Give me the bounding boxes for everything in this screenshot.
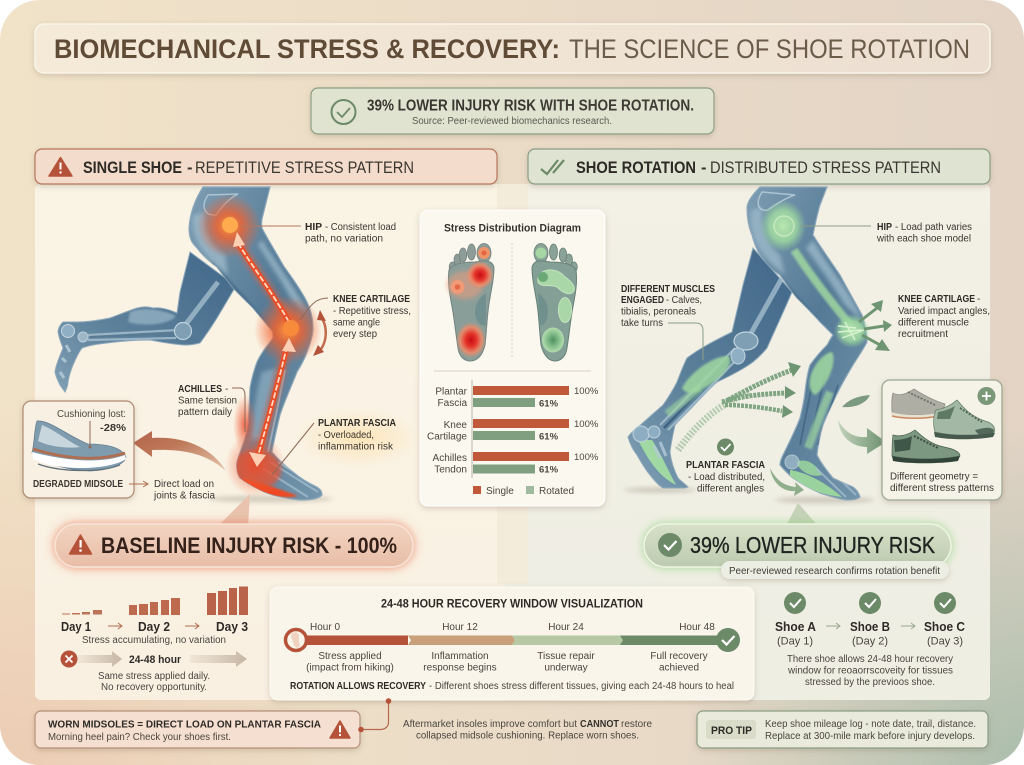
- heading: single shoe: -: [187, 159, 192, 177]
- icon: warning triangle: [70, 535, 92, 554]
- callout: different muscles engaged: tibialis, peroneals: [621, 306, 696, 318]
- callout: knee cartilage (rotation): KNEE CARTILAGE: [898, 294, 975, 305]
- panel: recovery window: 24-48 HOUR RECOVERY WINDOW VISUALIZATION: [381, 596, 643, 610]
- shoe rotation sequence: Shoe B: [850, 619, 890, 634]
- callout: pro tip: Replace at 300-mile mark before injury develops.: [765, 731, 975, 742]
- bar chart: stress by tissue: 61%: [539, 398, 559, 410]
- icon: check: [716, 628, 740, 652]
- panel: recovery window: [270, 587, 754, 700]
- foot map: single shoe: [447, 244, 494, 361]
- banner: 39% lower injury risk: 39% LOWER INJURY RISK: [367, 98, 536, 114]
- icon: x circle: [60, 650, 78, 668]
- callout: knee cartilage (rotation): different muscle: [898, 318, 969, 328]
- back leg: [628, 248, 792, 488]
- callout: direct load: Direct load on: [154, 479, 214, 490]
- figure: shoe rotation runner with distributed stress: [624, 187, 875, 504]
- panel: recovery window: ROTATION ALLOWS RECOVERY: [290, 681, 426, 692]
- shoe rotation sequence: (Day 2): [852, 636, 888, 648]
- icon: check circle: [332, 100, 356, 124]
- callout: knee cartilage (single shoe): KNEE CARTILAGE: [333, 294, 410, 305]
- arrow: foot to degraded midsole: [133, 431, 226, 471]
- text: aftermarket insoles: restore: [621, 719, 652, 730]
- bar chart: stress by tissue: Fascia: [438, 398, 467, 409]
- callout: knee cartilage (rotation): -: [977, 294, 980, 305]
- callout: plantar fascia (single shoe): [272, 408, 420, 475]
- shoe rotation sequence: [775, 592, 966, 688]
- title: BIOMECHANICAL STRESS & RECOVERY:: [54, 34, 560, 64]
- callout: knee cartilage (single shoe): every step: [333, 329, 377, 340]
- banner: 39% lower injury risk: WITH SHOE ROTATION.: [540, 98, 694, 114]
- no recovery timeline: Same stress applied daily.: [98, 671, 210, 682]
- callout: plantar fascia (rotation): PLANTAR FASCIA: [686, 460, 765, 471]
- panel: degraded midsole: [23, 401, 134, 498]
- callout: plantar fascia (rotation): [686, 438, 765, 494]
- callout: knee cartilage (single shoe): - Repetitive stress,: [333, 306, 411, 317]
- callout: pro tip: [697, 711, 988, 748]
- banner: 39% lower injury risk: Source: Peer-reviewed biomechanics research.: [412, 116, 612, 127]
- shoe rotation sequence: stressed by the previoos shoe.: [805, 677, 935, 688]
- panel: recovery window: Hour 12: [442, 622, 478, 633]
- bar chart: stress by tissue: 61%: [539, 464, 559, 476]
- chart: stress accumulation by day: Day 3: [216, 619, 248, 634]
- callout: worn midsoles: Morning heel pain? Check your shoes first.: [48, 732, 231, 743]
- arrows: to shoes: [838, 395, 886, 454]
- panel: stress distribution diagram: [420, 210, 605, 506]
- title: [35, 24, 990, 73]
- front leg: [189, 187, 322, 500]
- arrows: knee load variation: [859, 300, 892, 351]
- callout: hip (rotation): - Load path varies: [895, 222, 972, 233]
- heading: shoe rotation: [528, 149, 990, 184]
- green stress zones: [760, 200, 806, 252]
- no recovery timeline: 24-48 hour: [129, 654, 182, 666]
- heading: single shoe: REPETITIVE STRESS PATTERN: [195, 159, 414, 177]
- shoe rotation sequence: (Day 3): [927, 636, 963, 648]
- back leg: [55, 252, 236, 392]
- callout: knee cartilage (single shoe): same angle: [333, 318, 380, 328]
- callout: worn midsoles: [35, 711, 360, 748]
- callout: achilles: pattern daily: [178, 407, 232, 418]
- callout: knee cartilage (rotation): recruitment: [898, 329, 948, 340]
- banner: 39% lower injury risk: [311, 88, 714, 134]
- foot map: rotated: [532, 244, 577, 361]
- heading: shoe rotation: SHOE ROTATION: [576, 159, 696, 177]
- callout: 39% lower injury risk: [644, 503, 951, 579]
- callout: knee cartilage (rotation): [898, 294, 990, 340]
- text: aftermarket insoles: Aftermarket insoles improve comfort but: [403, 719, 577, 730]
- callout: achilles: -: [225, 384, 228, 395]
- callout: plantar fascia (rotation): different angles: [697, 484, 764, 494]
- bar chart: stress by tissue: Tendon: [434, 464, 467, 476]
- callout: plantar fascia (rotation): - Load distributed,: [688, 472, 765, 483]
- callout: hip (single shoe): HIP: [305, 222, 322, 233]
- bar chart: stress by tissue: Knee: [444, 420, 467, 431]
- figure: single shoe runner with stress path: [55, 187, 332, 502]
- icon: grey shoe: [891, 389, 945, 418]
- panel: recovery window: underway: [544, 662, 588, 674]
- panel: different shoes: Different geometry =: [890, 472, 978, 482]
- chart: stress accumulation by day: Stress accumulating, no variation: [82, 635, 226, 646]
- front leg shading: [193, 194, 320, 497]
- callout: hip (rotation): HIP: [877, 222, 892, 233]
- heading: shoe rotation: DISTRIBUTED STRESS PATTERN: [710, 159, 941, 177]
- callout: worn midsoles: WORN MIDSOLES = DIRECT LOAD ON PLANTAR FASCIA: [48, 718, 321, 730]
- bar chart: stress by tissue: Cartilage: [427, 432, 467, 442]
- chart: stress accumulation by day: Day 2: [138, 619, 170, 634]
- callout: hip (rotation): [800, 222, 972, 244]
- callout: hip (rotation): with each shoe model: [876, 234, 971, 244]
- sub label: peer reviewed: [721, 561, 949, 579]
- panel: recovery window: Stress applied: [318, 651, 382, 662]
- callout: different muscles engaged: ENGAGED: [621, 295, 664, 306]
- callout: achilles: [178, 384, 245, 432]
- callout: different muscles engaged: [621, 284, 715, 360]
- panel: degraded midsole: DEGRADED MIDSOLE: [33, 479, 123, 490]
- text: aftermarket insoles: CANNOT: [580, 719, 619, 730]
- chart: stress accumulation by day: [61, 586, 248, 646]
- chart: stress accumulation by day: Day 1: [61, 619, 91, 634]
- shoe rotation sequence: Shoe A: [775, 619, 817, 634]
- icon: check circle: [658, 533, 682, 557]
- no recovery timeline: No recovery opportunity.: [101, 682, 207, 693]
- legend: Rotated: [539, 486, 574, 497]
- front leg: [747, 187, 867, 500]
- panel: recovery window: response begins: [423, 662, 497, 674]
- no recovery timeline: [60, 650, 247, 693]
- knee motion arrows: [318, 315, 326, 353]
- stress arrows: [238, 243, 289, 456]
- callout: plantar fascia (single shoe): - Overloaded,: [318, 430, 374, 441]
- bar chart: stress by tissue: 100%: [574, 452, 599, 463]
- bars: day 3: [207, 586, 248, 615]
- callout: hip (single shoe): - Consistent load: [325, 222, 396, 233]
- callout: achilles: Same tension: [178, 396, 237, 406]
- callout: achilles: ACHILLES: [178, 384, 222, 395]
- icon: foot: [286, 630, 306, 650]
- heading: single shoe: SINGLE SHOE: [83, 159, 182, 177]
- callout: plantar fascia (single shoe): inflammation risk: [318, 442, 394, 452]
- arrow: foot motion: [770, 468, 804, 496]
- text: aftermarket insoles: [403, 719, 652, 742]
- icon: warning triangle: [330, 721, 350, 738]
- callout: plantar fascia (single shoe): PLANTAR FASCIA: [318, 418, 396, 429]
- icon: checks: [784, 592, 956, 614]
- title: THE SCIENCE OF SHOE ROTATION: [569, 34, 970, 64]
- panel: degraded midsole: Cushioning lost:: [57, 409, 126, 420]
- bar chart: stress by tissue: Achilles: [433, 453, 467, 464]
- panel: recovery window: - Different shoes stress different tissues, giving each 24-48 hours to heal: [429, 681, 734, 692]
- panel: recovery window: (impact from hiking): [306, 662, 394, 674]
- callout: different muscles engaged: take turns: [621, 318, 663, 329]
- callout: knee cartilage (rotation): Varied impact angles,: [898, 306, 990, 317]
- callout: hip (single shoe): path, no variation: [305, 234, 383, 244]
- panel: recovery window: Tissue repair: [537, 651, 595, 662]
- icon: double check: [541, 160, 564, 174]
- bar chart: stress by tissue: 100%: [574, 386, 599, 397]
- panel: recovery window: Hour 48: [679, 622, 715, 633]
- connector: recovery to worn midsoles: [358, 698, 391, 732]
- front leg shading: [750, 192, 862, 497]
- panel: different shoes: different stress patterns: [890, 483, 994, 494]
- panel: recovery window: Full recovery: [650, 651, 708, 662]
- callout: knee cartilage (single shoe): [300, 294, 411, 340]
- bar chart: stress by tissue: 100%: [574, 419, 599, 430]
- callout: different muscles engaged: DIFFERENT MUSCLES: [621, 284, 715, 295]
- callout: direct load: joints & fascia: [153, 490, 215, 502]
- panel: different shoes: [882, 380, 1002, 500]
- shoe rotation sequence: window for reoaorrscoveity for tissues: [787, 666, 953, 676]
- callout: baseline injury risk: BASELINE INJURY RISK - 100%: [101, 533, 397, 558]
- callout: baseline injury risk: [55, 494, 413, 567]
- heading: single shoe: [35, 149, 497, 184]
- bar chart: stress by tissue: Plantar: [435, 386, 468, 398]
- bars: day 1: [62, 610, 102, 614]
- callout: different muscles engaged: - Calves,: [666, 295, 702, 306]
- panel: degraded midsole: -28%: [100, 422, 127, 434]
- callout: direct load: [129, 479, 215, 502]
- heading: shoe rotation: -: [701, 159, 706, 177]
- shoe rotation sequence: Shoe C: [924, 619, 966, 634]
- bar chart: stress by tissue: 61%: [539, 432, 559, 442]
- icon: warning triangle: [49, 158, 72, 176]
- icon: dark green shoe: [892, 430, 960, 463]
- panel: recovery window: Hour 0: [310, 622, 340, 633]
- panel: stress distribution diagram: Stress Distribution Diagram: [444, 222, 581, 234]
- callout: hip (single shoe): [240, 222, 396, 244]
- sub label: peer reviewed: Peer-reviewed research confirms rotation benefit: [729, 566, 940, 577]
- arrows: stress redistribution: [678, 362, 801, 450]
- text: aftermarket insoles: collapsed midsole cushioning. Replace worn shoes.: [416, 730, 639, 742]
- shoe rotation sequence: There shoe allows 24-48 hour recovery: [787, 654, 953, 665]
- timeline: [286, 628, 740, 652]
- icon: worn shoe: [32, 421, 126, 471]
- icon: plus: [978, 387, 996, 405]
- callout: pro tip: Keep shoe mileage log - note date, trail, distance.: [765, 719, 976, 730]
- bars: day 2: [129, 598, 180, 615]
- legend: [473, 486, 574, 497]
- stress glows: [197, 194, 261, 258]
- callout: pro tip: PRO TIP: [711, 725, 752, 737]
- icon: green shoe: [934, 400, 995, 439]
- bar chart: stress by tissue: [427, 380, 599, 478]
- panel: recovery window: Inflammation: [431, 651, 489, 662]
- shoe rotation sequence: (Day 1): [777, 636, 813, 648]
- panel: recovery window: Hour 24: [548, 622, 584, 633]
- panel: recovery window: achieved: [659, 662, 699, 674]
- legend: Single: [486, 486, 514, 497]
- callout: 39% lower injury risk: 39% LOWER INJURY RISK: [690, 532, 936, 558]
